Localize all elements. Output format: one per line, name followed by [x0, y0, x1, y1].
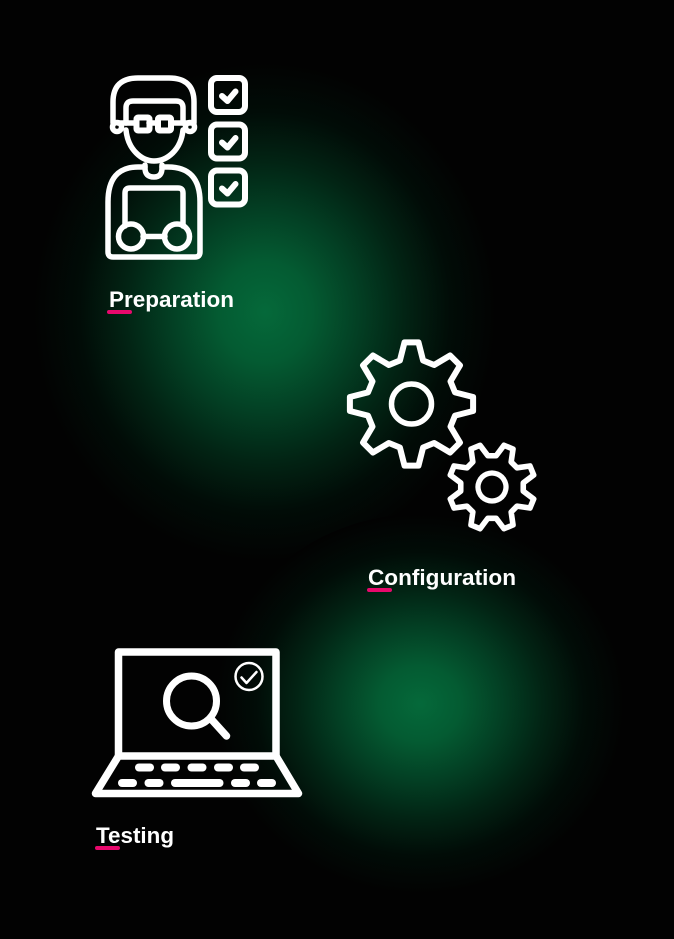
panel: testing — [95, 652, 298, 850]
icon: gears — [350, 342, 548, 543]
panel: preparation — [107, 78, 245, 314]
panel: configuration — [350, 342, 548, 592]
label: Testing: Testing — [96, 823, 174, 848]
label: Preparation: Preparation — [109, 287, 234, 312]
underline: Configuration — [367, 588, 392, 592]
label: Configuration: Configuration — [368, 565, 516, 590]
underline: Preparation — [107, 310, 132, 314]
icon: laptop with magnifier — [96, 652, 298, 794]
green glow: lower — [215, 514, 625, 894]
green glow: upper — [33, 62, 497, 562]
icon: person with checklist — [108, 78, 245, 257]
underline: Testing — [95, 846, 120, 850]
